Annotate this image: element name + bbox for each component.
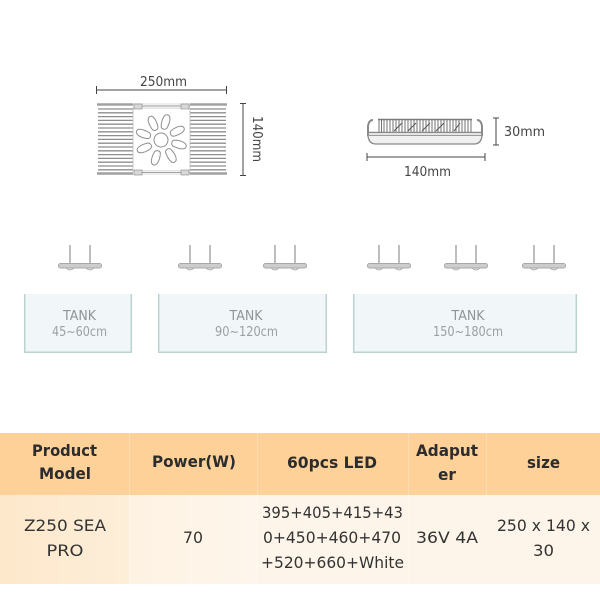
dimension: 30mm height xyxy=(493,118,545,145)
tank: 45~60cm: 45~60cm xyxy=(52,325,107,340)
lamp: medium tank left xyxy=(178,245,222,270)
icon: fan blades xyxy=(135,114,187,166)
lamp: small tank xyxy=(58,245,102,270)
table data row: 36V 4A xyxy=(416,528,478,547)
specification table xyxy=(0,433,600,584)
lamp top view xyxy=(97,103,227,175)
table data row: +520+660+White xyxy=(261,553,404,572)
lamp: large tank right xyxy=(522,245,566,270)
dimension: 140mm height: 140mm xyxy=(249,116,264,162)
tank: 90~120cm xyxy=(158,294,327,353)
table header row: Model xyxy=(39,464,91,483)
table header row: 60pcs LED xyxy=(287,453,377,472)
lamp: large tank centre xyxy=(444,245,488,270)
tank: 150~180cm: 150~180cm xyxy=(433,325,503,340)
tank: 150~180cm xyxy=(353,294,577,353)
lamp: large tank left xyxy=(368,245,410,270)
lamp: medium tank right xyxy=(264,245,306,270)
lamp side view xyxy=(368,119,482,144)
dimension: 140mm width xyxy=(367,153,485,180)
table data row: 0+450+460+470 xyxy=(263,528,401,547)
tank: 90~120cm: 90~120cm xyxy=(215,325,278,340)
table data row: Z250 SEA xyxy=(24,516,106,535)
table data row: PRO xyxy=(46,541,84,560)
table data row: 395+405+415+43 xyxy=(262,503,403,522)
table header row: Adaput xyxy=(416,441,478,460)
table header row: er xyxy=(438,465,456,484)
dimension: 250mm width xyxy=(96,75,226,94)
tank: 45~60cm xyxy=(24,294,132,353)
table data row: 70 xyxy=(183,528,203,547)
table header row xyxy=(0,433,600,495)
dimension: 30mm height: 30mm xyxy=(504,125,545,140)
table data row xyxy=(0,495,600,584)
tank: 45~60cm: TANK xyxy=(62,309,96,324)
dimension: 250mm width: 250mm xyxy=(140,75,187,90)
dimension: 140mm height xyxy=(240,104,264,176)
tank: 90~120cm: TANK xyxy=(229,309,263,324)
table data row: 30 xyxy=(533,541,554,560)
dimension: 140mm width: 140mm xyxy=(404,165,451,180)
table header row: Power(W) xyxy=(152,452,236,471)
tank: 150~180cm: TANK xyxy=(451,309,485,324)
table data row: 250 x 140 x xyxy=(497,516,590,535)
table header row: Product xyxy=(32,441,97,460)
table header row: size xyxy=(527,453,560,472)
